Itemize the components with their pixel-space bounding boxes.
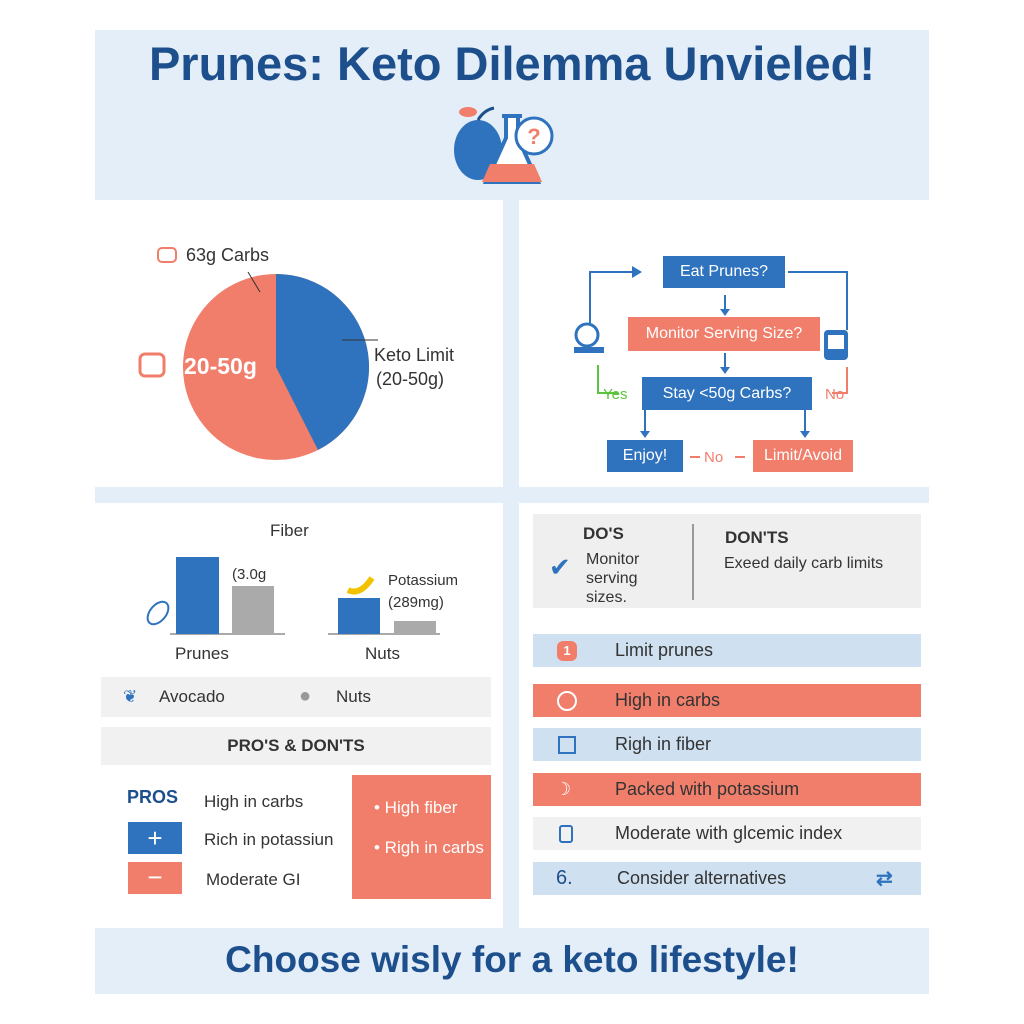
flowchart connectors — [574, 266, 848, 466]
flow box: Limit: Limit/Avoid — [764, 447, 842, 464]
flow box: Eat Prunes: Eat Prunes? — [680, 263, 768, 280]
list row 6: ⇄ — [876, 868, 893, 890]
bar chart: (3.0g — [232, 566, 266, 583]
list row 1: 1 — [563, 642, 571, 658]
flow box: Monitor: Monitor Serving Size? — [646, 325, 802, 342]
icon: prune and flask — [454, 106, 554, 184]
bar chart: Potassium — [388, 572, 458, 589]
do's and don'ts box: DON'TS — [725, 528, 789, 547]
list row 5: Moderate with glcemic index — [615, 823, 842, 843]
heading: pro's & don'ts — [101, 727, 491, 765]
pros list — [127, 787, 333, 894]
flowchart connectors: Yes — [603, 386, 627, 403]
list row 6: Consider alternatives — [617, 868, 786, 888]
list row 2 — [533, 684, 921, 717]
legend: avocado nuts — [101, 677, 491, 717]
flow box: Enjoy — [607, 440, 683, 472]
flowchart connectors: No — [825, 386, 844, 403]
legend: avocado nuts: Avocado — [159, 687, 225, 706]
list row 3 — [533, 728, 921, 761]
list row 1 — [533, 634, 921, 667]
pros list: − — [147, 862, 163, 892]
list row 6 — [533, 862, 921, 895]
list row 6: 6. — [556, 867, 573, 889]
flow box: Eat Prunes — [663, 256, 785, 288]
do's and don'ts box: sizes. — [586, 589, 627, 606]
pie chart: (20-50g) — [376, 369, 444, 389]
flow box: Stay: Stay <50g Carbs? — [663, 385, 791, 402]
pros list: Rich in potassiun — [204, 830, 333, 849]
list row 4: Packed with potassium — [615, 779, 799, 799]
bar chart: (289mg) — [388, 594, 444, 611]
background grid panels — [95, 30, 929, 994]
coral cons box — [352, 775, 491, 899]
coral cons box: • Righ in carbs — [374, 838, 484, 857]
bar chart: Prunes — [175, 644, 229, 663]
icon: prune and flask: ? — [527, 124, 541, 149]
flow box: Stay — [642, 377, 812, 410]
do's and don'ts box — [533, 514, 921, 608]
do's and don'ts box: Exeed daily carb limits — [724, 555, 883, 572]
pros list: Moderate GI — [206, 870, 300, 889]
pie chart — [138, 245, 454, 460]
pros list: High in carbs — [204, 792, 303, 811]
legend: avocado nuts: Nuts — [336, 687, 371, 706]
pros list: PROS — [127, 787, 178, 807]
coral cons box: • High fiber — [374, 798, 457, 817]
heading: pro's & don'ts: PRO'S & DON'TS — [227, 736, 365, 755]
list row 4: ☽ — [555, 779, 571, 799]
pie chart: Keto Limit — [374, 345, 454, 365]
list row 5 — [533, 817, 921, 850]
flow box: Enjoy: Enjoy! — [623, 447, 667, 464]
footer text: Choose wisly for a keto lifestyle! — [225, 939, 799, 980]
flow box: Monitor — [628, 317, 820, 351]
do's and don'ts box: Monitor — [586, 551, 639, 568]
title: Prunes: Keto Dilemma Unvieled! — [149, 37, 875, 90]
pie chart: 63g Carbs — [186, 245, 269, 265]
bar chart — [146, 521, 458, 663]
do's and don'ts box: ✔ — [549, 552, 571, 582]
list row 3: Righ in fiber — [615, 734, 711, 754]
do's and don'ts box: DO'S — [583, 524, 624, 543]
pros list: + — [147, 823, 163, 853]
legend: avocado nuts: ❦ — [123, 687, 137, 706]
do's and don'ts box: serving — [586, 570, 638, 587]
flow box: Limit — [753, 440, 853, 472]
bar chart: Fiber — [270, 521, 309, 540]
list row 4 — [533, 773, 921, 806]
bar chart: Nuts — [365, 644, 400, 663]
legend: avocado nuts: ● — [299, 685, 311, 707]
list row 2: High in carbs — [615, 690, 720, 710]
list row 1: Limit prunes — [615, 640, 713, 660]
flowchart connectors: No — [704, 449, 723, 466]
pie chart: 20-50g — [184, 353, 257, 379]
